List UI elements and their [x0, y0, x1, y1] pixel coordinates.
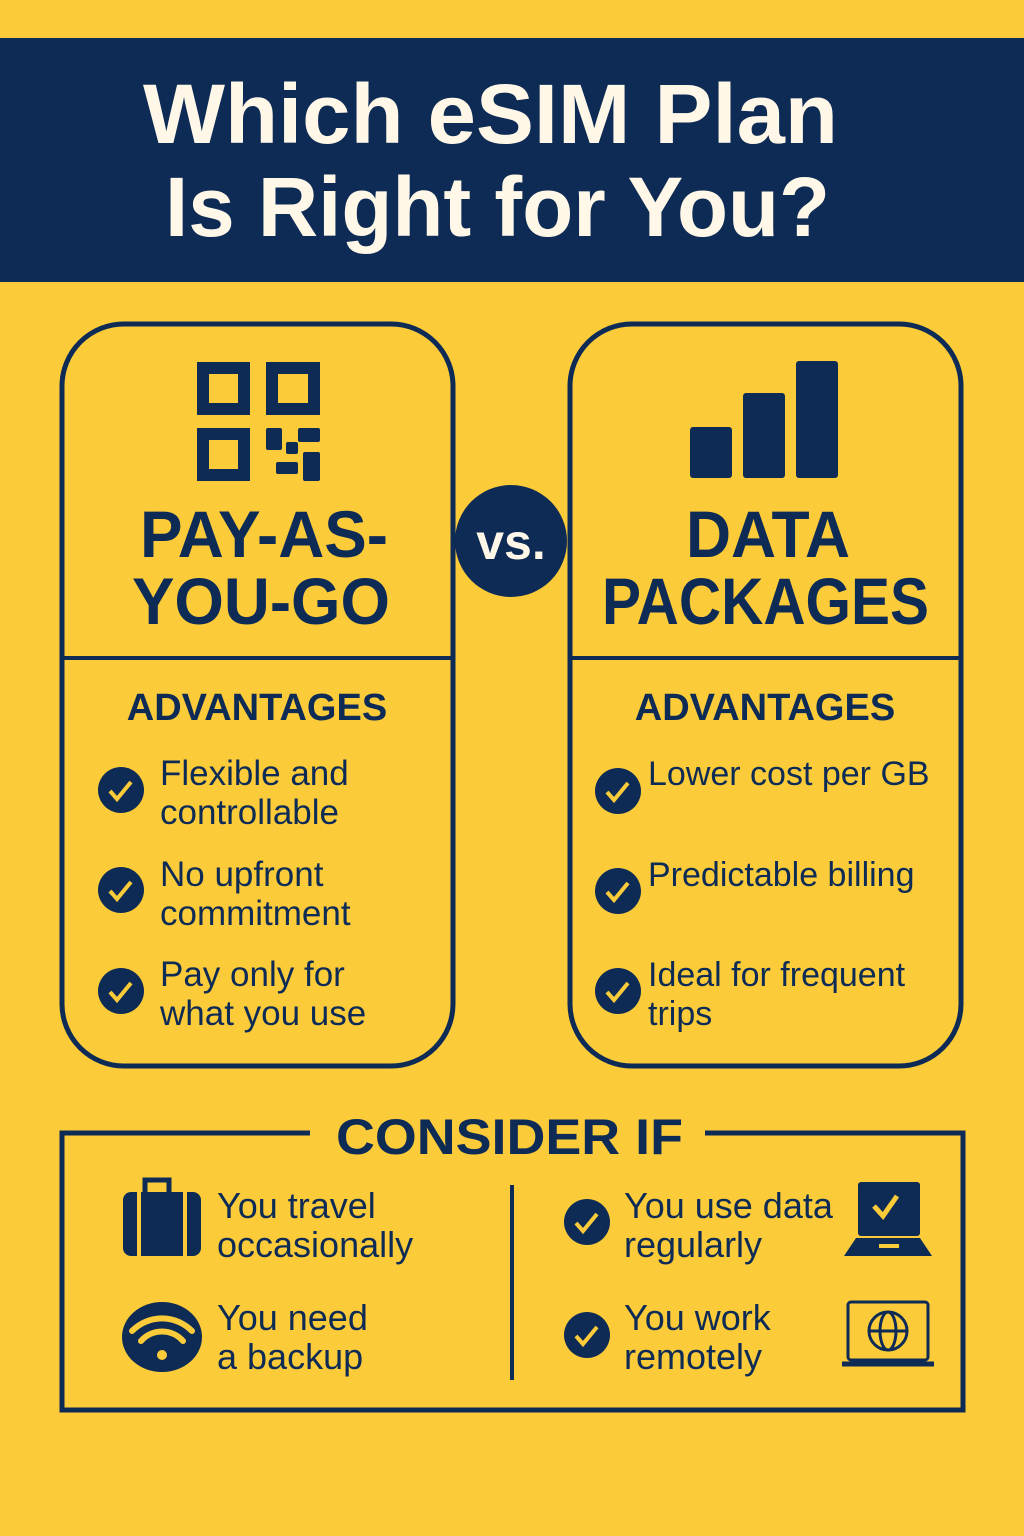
header banner: [0, 38, 1024, 282]
heading: consider if: CONSIDER IF: [336, 1109, 683, 1165]
icon: bar chart: [690, 361, 838, 478]
item: need a backup: You need: [217, 1297, 368, 1338]
panel: data packages: [570, 324, 961, 1066]
item: work remotely: You work: [624, 1297, 772, 1338]
subheading: advantages: ADVANTAGES: [127, 687, 387, 729]
item: use data regularly: [564, 1182, 932, 1265]
icon: laptop check: [844, 1182, 932, 1256]
title: Which eSIM Plan: [143, 67, 838, 161]
list: left advantages: [98, 754, 366, 1033]
item: use data regularly: regularly: [624, 1224, 762, 1265]
icon: suitcase: [123, 1180, 201, 1256]
list: left advantages: No upfront: [160, 855, 324, 894]
icon: laptop globe: [842, 1302, 934, 1364]
panel: pay-as-you-go: [62, 324, 453, 1066]
list: left advantages: controllable: [160, 793, 339, 832]
heading: DATA PACKAGES: DATA: [686, 497, 850, 571]
heading: DATA PACKAGES: [602, 497, 929, 638]
item: use data regularly: You use data: [624, 1185, 834, 1226]
vs badge: vs.: [476, 514, 546, 570]
list: right advantages: Ideal for frequent: [648, 956, 906, 994]
list: right advantages: [595, 755, 930, 1033]
heading: PAY-AS-YOU-GO: [132, 497, 390, 638]
item: travel occasionally: [123, 1180, 413, 1265]
vs badge: [455, 485, 567, 597]
heading: PAY-AS-YOU-GO: PAY-AS-: [140, 497, 388, 571]
icon: QR code: [197, 362, 320, 481]
item: work remotely: [564, 1297, 934, 1377]
list: right advantages: trips: [648, 995, 712, 1033]
list: left advantages: commitment: [160, 894, 351, 933]
item: need a backup: [122, 1297, 368, 1377]
list: right advantages: Lower cost per GB: [648, 755, 930, 793]
icon: wifi: [122, 1302, 202, 1372]
list: left advantages: Pay only for: [160, 955, 345, 994]
heading: PAY-AS-YOU-GO: YOU-GO: [132, 564, 390, 638]
subheading: advantages: ADVANTAGES: [635, 687, 895, 729]
item: travel occasionally: occasionally: [217, 1224, 413, 1265]
item: work remotely: remotely: [624, 1336, 762, 1377]
panel: consider if: [62, 1109, 963, 1410]
list: left advantages: what you use: [159, 994, 366, 1033]
list: right advantages: Predictable billing: [648, 856, 914, 894]
item: travel occasionally: You travel: [217, 1185, 376, 1226]
heading: DATA PACKAGES: PACKAGES: [602, 564, 929, 638]
list: left advantages: Flexible and: [160, 754, 349, 793]
title: [143, 67, 838, 254]
item: need a backup: a backup: [217, 1336, 363, 1377]
title: Is Right for You?: [165, 160, 830, 254]
